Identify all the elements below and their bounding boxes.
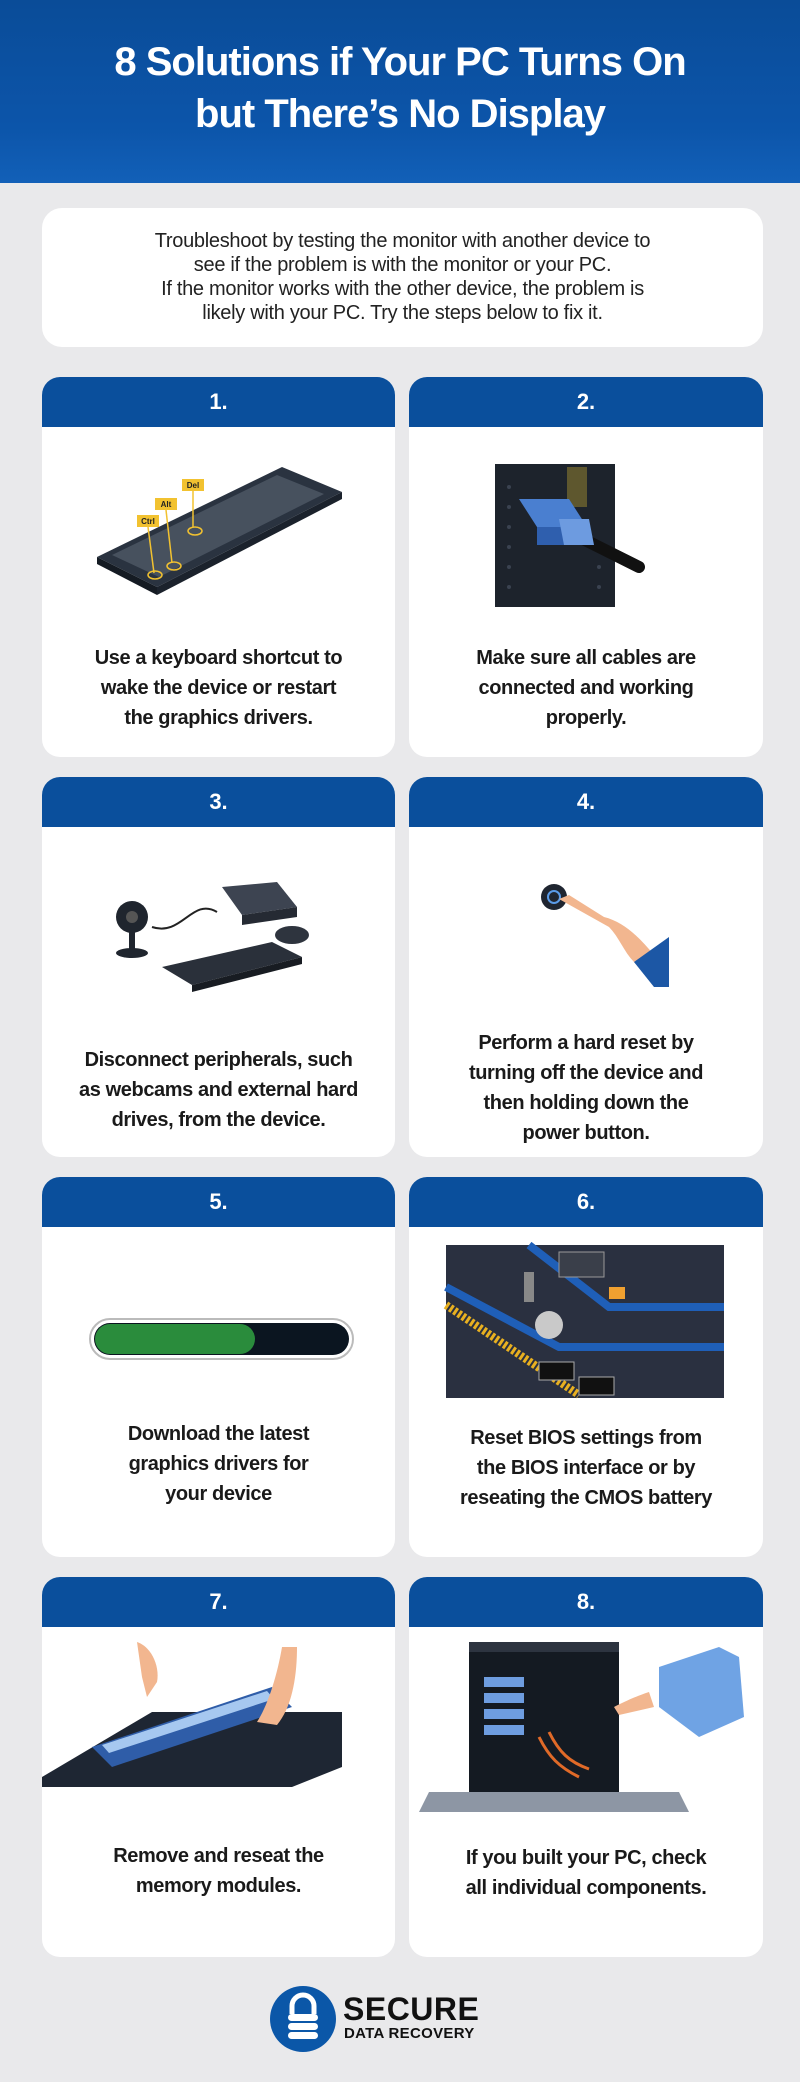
text: all individual components.	[466, 1877, 706, 1899]
title	[114, 40, 686, 136]
text: connected and working	[479, 677, 693, 699]
card 8: components	[409, 1577, 763, 1957]
text: reseating the CMOS battery	[460, 1487, 712, 1509]
text: Download the latest	[128, 1423, 309, 1445]
card 8: components: 8.	[577, 1589, 595, 1614]
icon: keyboard: Del	[187, 481, 199, 490]
icon: lock	[270, 1986, 336, 2052]
intro text box: likely with your PC. Try the steps below to fix it.	[202, 302, 603, 324]
icon: hands with RAM module	[42, 1642, 342, 1787]
text	[79, 1049, 358, 1131]
text	[469, 1032, 703, 1144]
text: then holding down the	[484, 1092, 688, 1114]
intro text box	[42, 208, 763, 347]
text: If you built your PC, check	[466, 1847, 706, 1869]
icon: keyboard: Alt	[161, 500, 172, 509]
text: turning off the device and	[469, 1062, 703, 1084]
card 6: BIOS: 6.	[577, 1189, 595, 1214]
icon: keyboard	[97, 467, 342, 595]
intro text box: see if the problem is with the monitor or your PC.	[194, 254, 611, 276]
card 7: memory: 7.	[209, 1589, 228, 1614]
text: properly.	[546, 707, 626, 729]
text: drives, from the device.	[112, 1109, 325, 1131]
card 7: memory	[42, 1577, 395, 1957]
card 6: BIOS	[409, 1177, 763, 1557]
brand name: SECURE	[343, 1991, 479, 2027]
card 1: keyboard shortcut	[42, 377, 395, 757]
title: 8 Solutions if Your PC Turns On	[114, 40, 686, 84]
intro text box: If the monitor works with the other device, the problem is	[161, 278, 644, 300]
text: graphics drivers for	[129, 1453, 308, 1475]
intro text box: Troubleshoot by testing the monitor with another device to	[155, 230, 650, 252]
text: memory modules.	[136, 1875, 301, 1897]
text: your device	[165, 1483, 272, 1505]
icon: motherboard	[444, 1242, 724, 1398]
card 2: cables: 2.	[577, 389, 595, 414]
card 2: cables	[409, 377, 763, 757]
card 5: drivers: 5.	[209, 1189, 228, 1214]
title: but There’s No Display	[195, 92, 605, 136]
text: Perform a hard reset by	[478, 1032, 694, 1054]
icon: PC tower with hand	[419, 1642, 744, 1812]
text: the graphics drivers.	[124, 707, 313, 729]
text: Remove and reseat the	[113, 1845, 324, 1867]
icon: keyboard: Ctrl	[141, 517, 155, 526]
icon: webcam, drive, keyboard	[116, 882, 309, 992]
icon: finger on power button	[541, 884, 669, 987]
text	[466, 1847, 707, 1899]
icon: VGA cable	[495, 464, 645, 607]
card 4: hard reset: 4.	[577, 789, 595, 814]
text: wake the device or restart	[101, 677, 336, 699]
card 4: hard reset	[409, 777, 763, 1157]
icon: progress bar	[89, 1318, 354, 1360]
logo: DATA RECOVERY	[344, 2025, 475, 2042]
text	[113, 1845, 324, 1897]
text: Make sure all cables are	[476, 647, 696, 669]
card 3: peripherals	[42, 777, 395, 1157]
text: power button.	[522, 1122, 650, 1144]
text: Reset BIOS settings from	[470, 1427, 702, 1449]
text	[95, 647, 342, 729]
text: Use a keyboard shortcut to	[95, 647, 342, 669]
text: Disconnect peripherals, such	[85, 1049, 352, 1071]
card 3: peripherals: 3.	[209, 789, 228, 814]
card 1: keyboard shortcut: 1.	[209, 389, 228, 414]
text	[476, 647, 696, 729]
text: the BIOS interface or by	[477, 1457, 695, 1479]
card 5: drivers	[42, 1177, 395, 1557]
text	[128, 1423, 310, 1505]
text	[460, 1427, 712, 1509]
logo	[270, 1986, 479, 2052]
text: as webcams and external hard	[79, 1079, 358, 1101]
header banner	[0, 0, 800, 183]
